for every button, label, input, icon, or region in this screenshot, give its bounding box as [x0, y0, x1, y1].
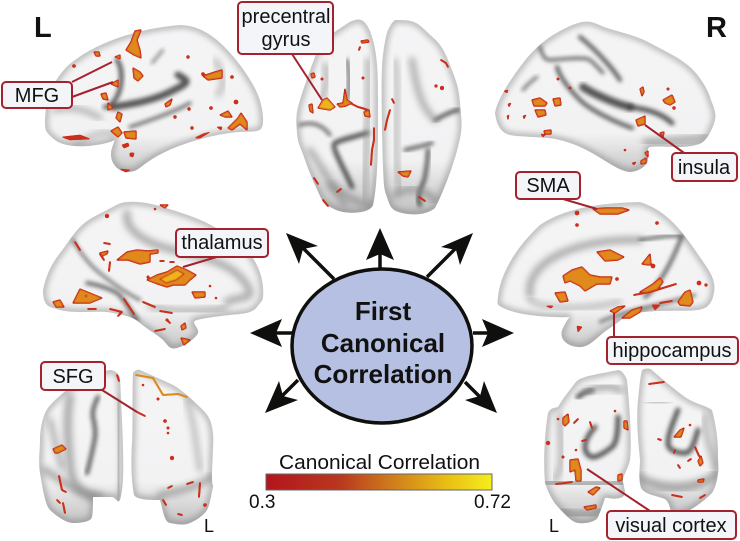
callout: SFG: SFG	[52, 366, 94, 388]
callout: SMA: SMA	[526, 175, 570, 197]
legend: colour bar: 0.72	[474, 492, 511, 513]
callout: thalamus: thalamus	[181, 232, 263, 254]
callout: insula: insula	[678, 157, 731, 179]
callout: hippocampus	[607, 313, 738, 364]
callout: MFG: MFG	[15, 85, 59, 107]
central oval: First Canonical Correlation	[292, 269, 472, 423]
callout: MFG	[2, 62, 113, 108]
callout: SMA	[516, 172, 597, 209]
brain: bottom-right posterior view	[540, 365, 723, 527]
view marker: bottom-left L: L	[204, 516, 214, 536]
callout: hippocampus: hippocampus	[613, 340, 731, 362]
legend: colour bar: 0.3	[249, 492, 275, 513]
callout: precentral gyrus	[238, 2, 333, 100]
callout: thalamus	[176, 229, 268, 267]
arrow: right	[473, 319, 514, 347]
arrow: up-left	[286, 233, 334, 279]
callout: SFG	[41, 362, 137, 412]
arrow: down-right	[465, 381, 497, 413]
legend: colour bar: Canonical Correlation	[279, 452, 480, 474]
heading: right hemisphere: R	[706, 12, 727, 44]
callout: visual cortex: visual cortex	[615, 515, 727, 537]
arrow: up-right	[427, 233, 473, 277]
arrow: down-left	[265, 380, 298, 413]
brain: top view	[290, 15, 465, 217]
arrow: up	[366, 228, 394, 270]
brain: left medial view	[43, 202, 264, 348]
brain: right lateral view	[495, 22, 716, 172]
arrows radiating from central oval	[250, 228, 514, 413]
callout: precentral gyrus: precentral	[242, 6, 330, 28]
view marker: bottom-right L: L	[549, 516, 559, 536]
brain: right medial view	[498, 202, 714, 348]
callout: visual cortex	[587, 469, 736, 539]
central oval: First Canonical Correlation: Correlation	[314, 359, 452, 389]
arrow: left	[250, 319, 292, 347]
legend: colour bar	[249, 452, 511, 513]
central oval: First Canonical Correlation: Canonical	[321, 328, 445, 358]
callout: precentral gyrus: gyrus	[262, 29, 310, 51]
heading: left hemisphere: L	[34, 12, 52, 44]
brain: left lateral view	[45, 25, 264, 172]
brain: bottom-left anterior view	[35, 365, 220, 527]
central oval: First Canonical Correlation: First	[355, 296, 412, 326]
callout: insula	[645, 125, 737, 181]
